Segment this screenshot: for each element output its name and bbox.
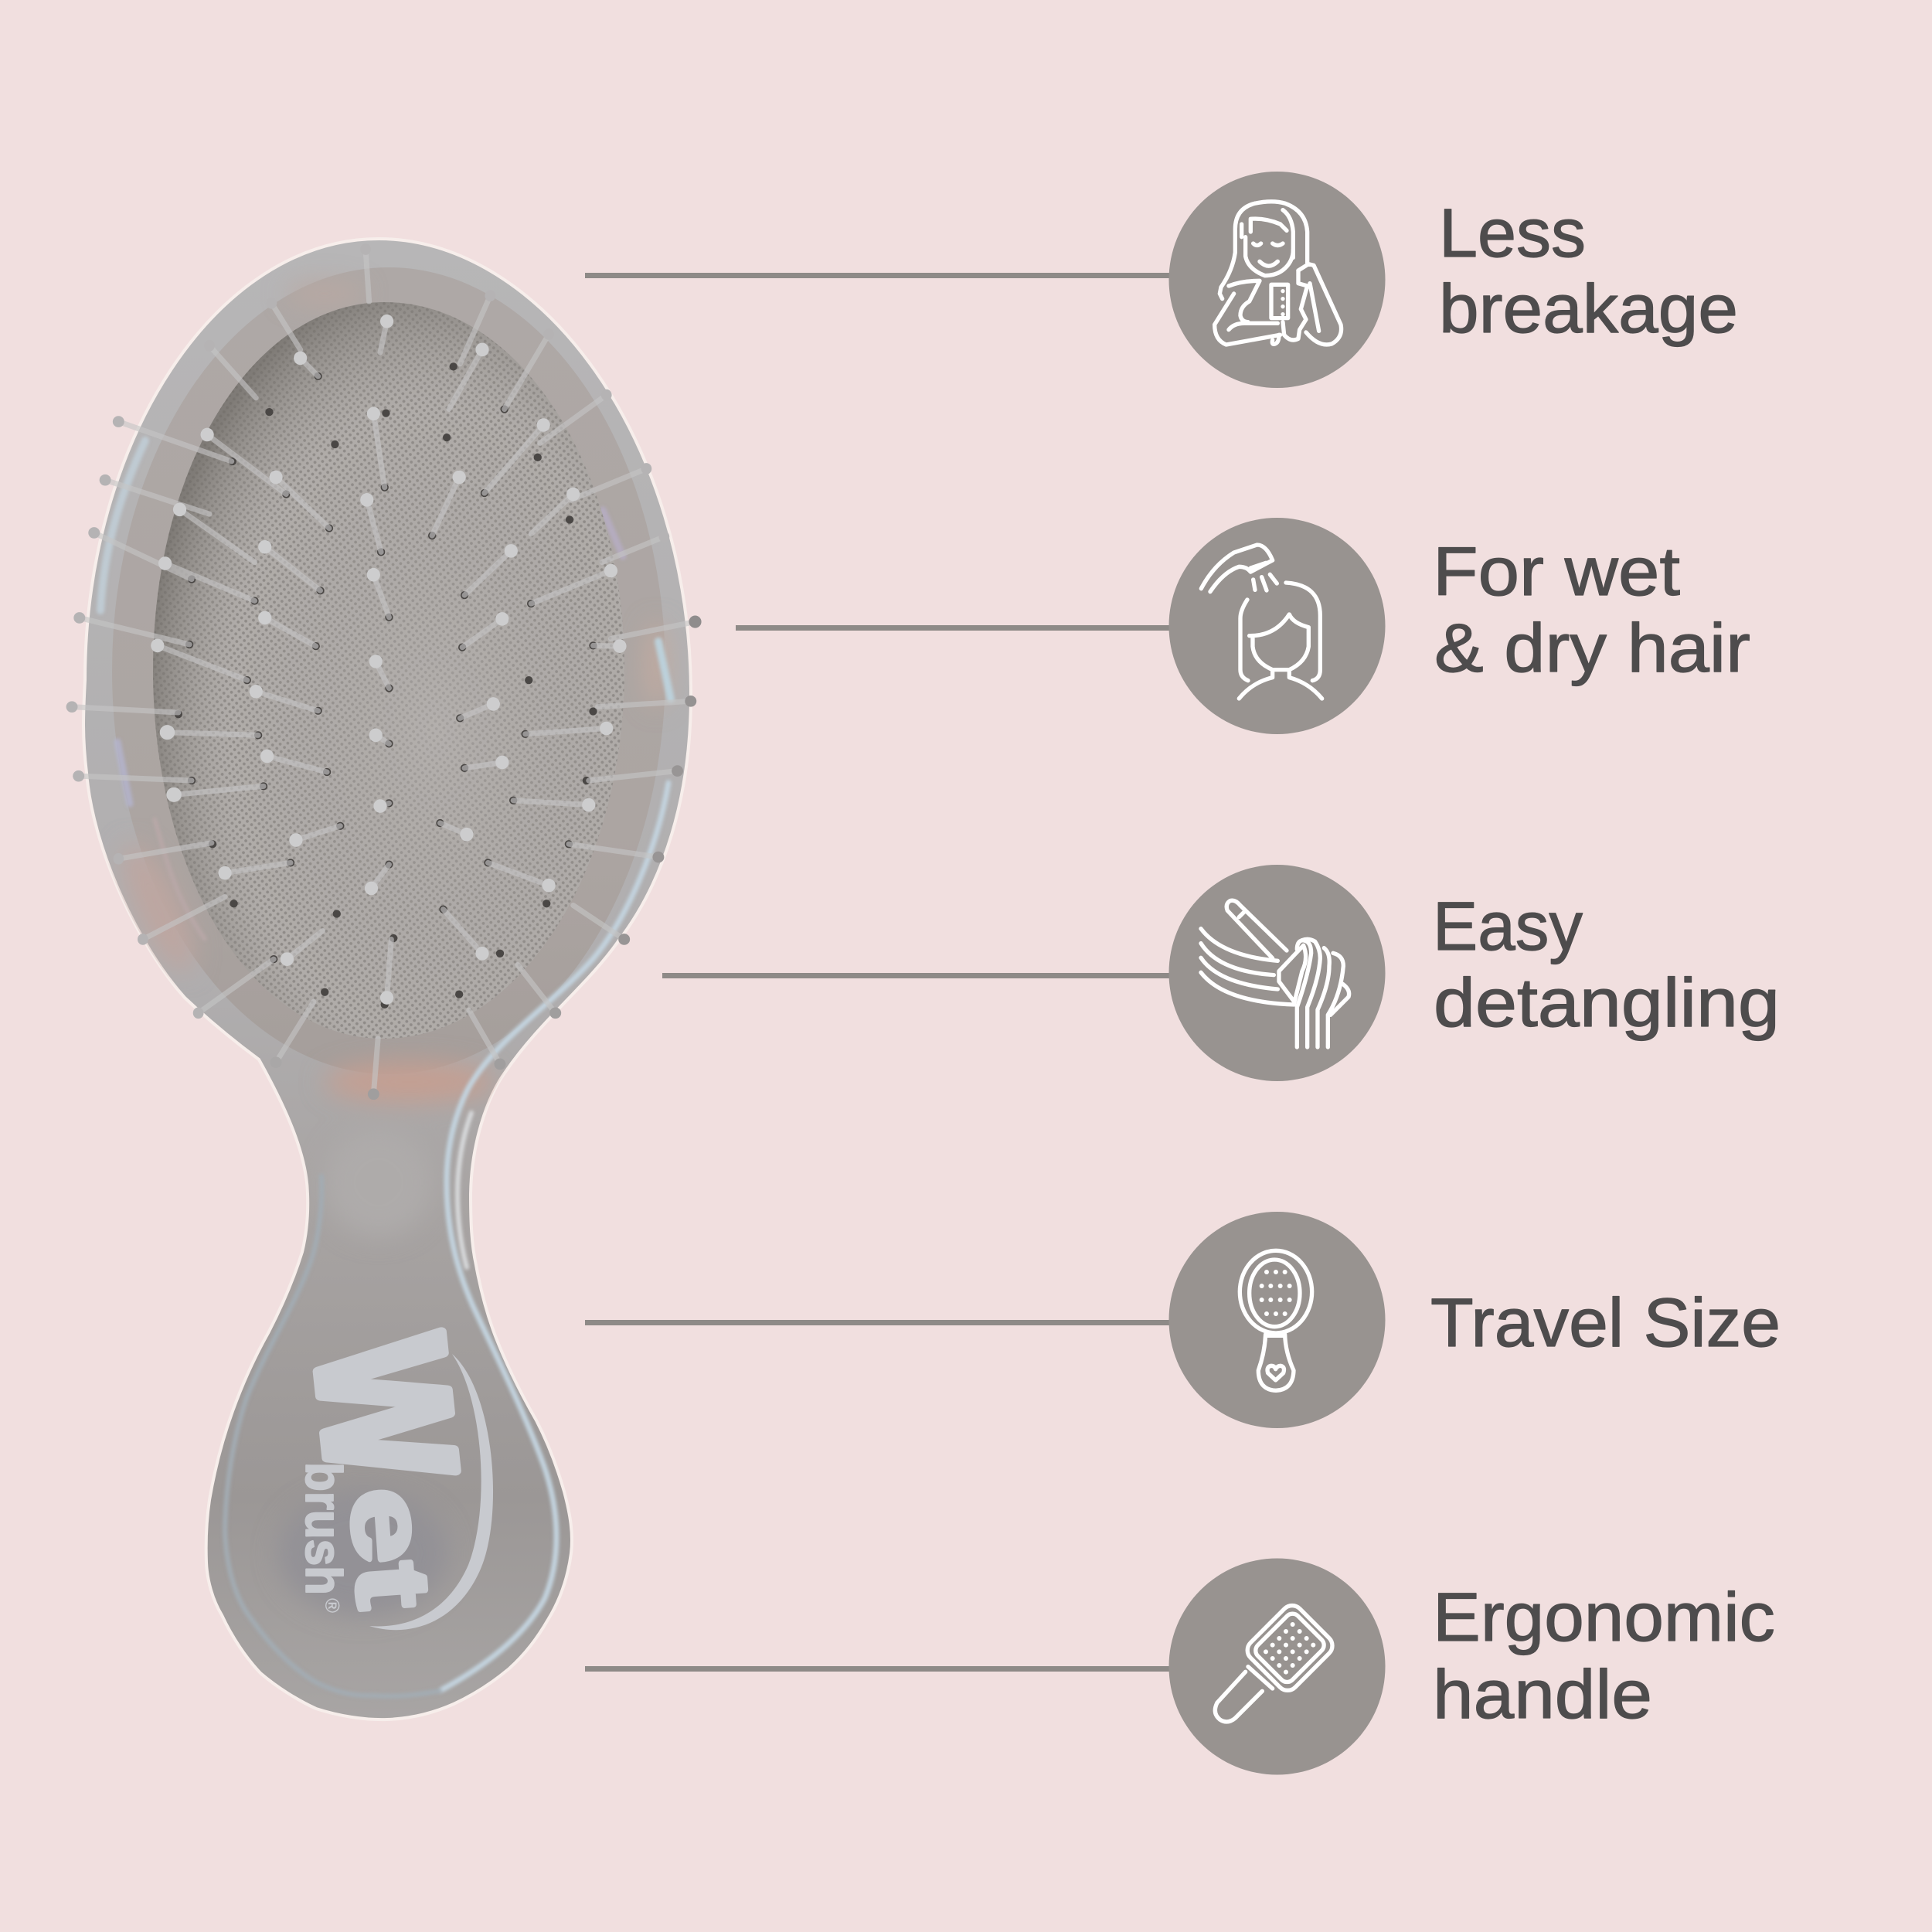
text: For wet & dry hair <box>1433 532 1750 686</box>
text: For wet & dry hair: For wet <box>1433 532 1680 610</box>
text: Easy detangling <box>1433 887 1780 1041</box>
bristle pins <box>72 250 696 1094</box>
feature: less breakage <box>1168 172 1738 388</box>
text: Travel Size: Travel Size <box>1430 1284 1781 1361</box>
infographic canvas <box>66 172 1778 1774</box>
text: Less breakage: Less <box>1439 194 1586 271</box>
icon: woman brushing hair <box>1168 172 1385 388</box>
brush body <box>83 239 691 1719</box>
logo: Wet brush: ® <box>321 1598 344 1613</box>
text: Less breakage <box>1439 194 1738 347</box>
text: Ergonomic handle: handle <box>1433 1655 1652 1733</box>
text: Easy detangling: detangling <box>1434 964 1780 1041</box>
bristle holes <box>175 362 597 1009</box>
text: Less breakage: breakage <box>1439 270 1738 347</box>
text: Ergonomic handle: Ergonomic <box>1433 1578 1775 1655</box>
icon: shower and hair <box>1168 518 1385 734</box>
bristle tips <box>66 243 702 1100</box>
feature: travel size <box>1168 1212 1781 1428</box>
logo: Wet brush: brush <box>295 1462 352 1595</box>
text: Ergonomic handle <box>1433 1578 1775 1733</box>
text: Easy detangling: Easy <box>1433 887 1583 964</box>
icon: detangling hair <box>1168 865 1385 1081</box>
holographic reflections <box>100 267 671 1696</box>
product: hairbrush <box>66 239 702 1719</box>
connector lines <box>585 273 1172 1672</box>
logo: Wet brush: W <box>276 1328 495 1489</box>
feature: for wet and dry hair <box>1168 518 1750 734</box>
bristle cushion mesh <box>153 302 624 1039</box>
icon: paddle brush <box>1168 1558 1385 1774</box>
logo: Wet brush: et <box>328 1484 452 1612</box>
text: For wet & dry hair: & dry hair <box>1434 609 1750 686</box>
feature: easy detangling <box>1168 865 1780 1081</box>
feature: ergonomic handle <box>1168 1558 1775 1774</box>
logo: Wet brush <box>276 1328 495 1630</box>
icon: small brush with heart <box>1168 1212 1385 1428</box>
